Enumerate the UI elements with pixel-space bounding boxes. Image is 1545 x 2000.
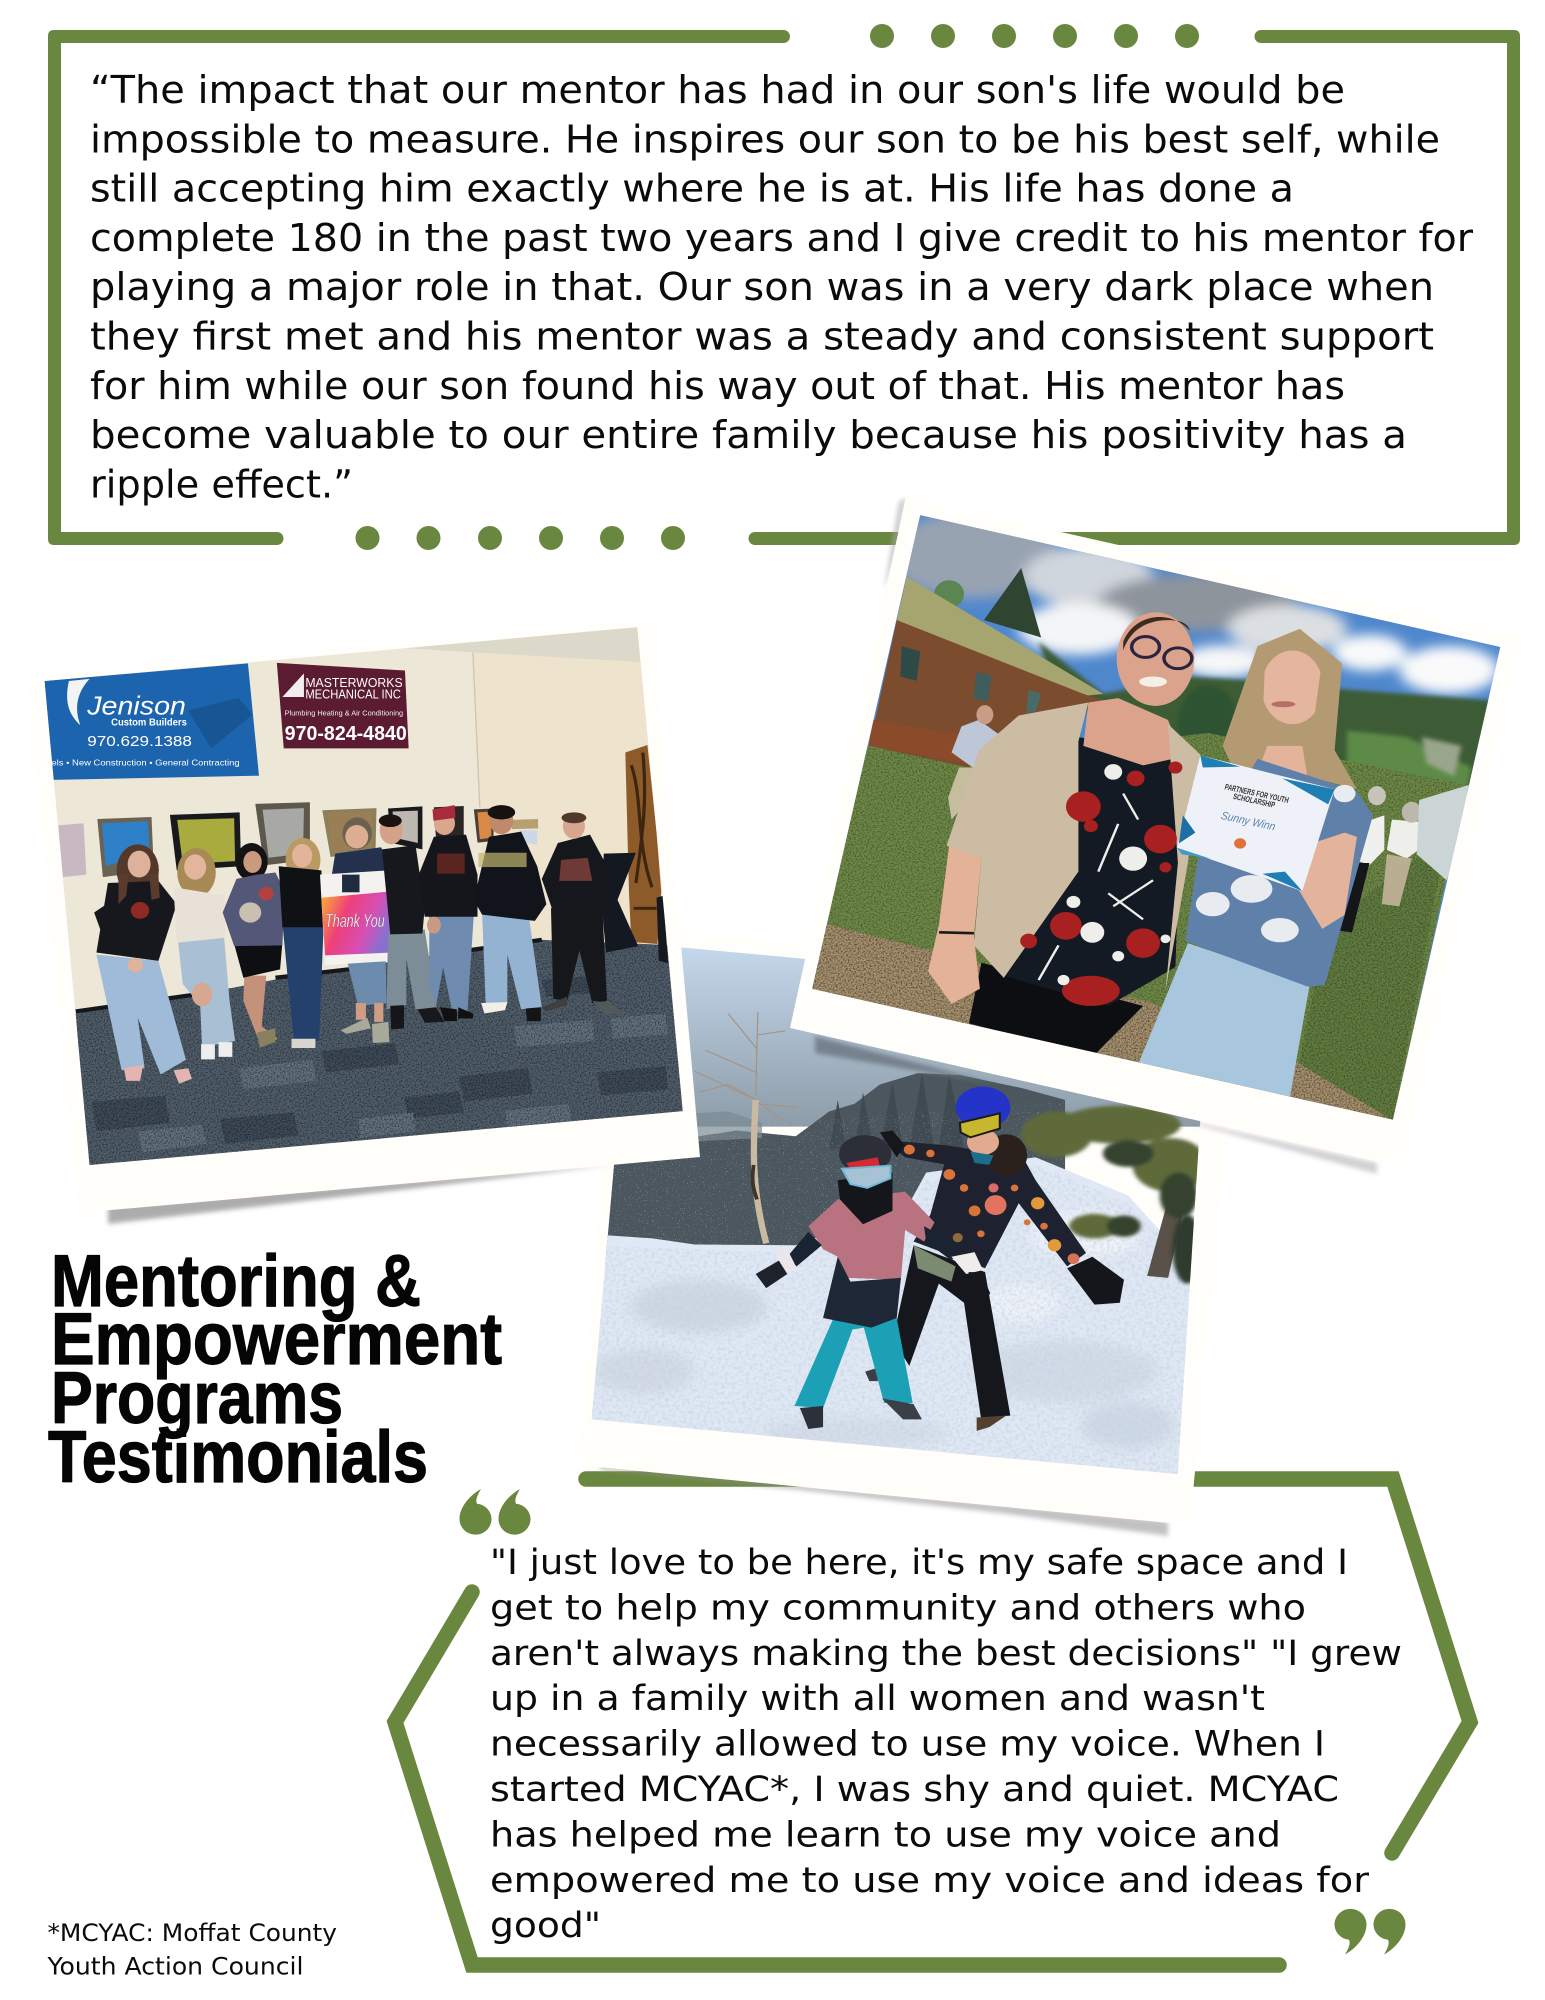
panel: top testimonial frame [48,24,1520,550]
scholarship certificate: PARTNERS FOR YOUTH [1224,782,1290,805]
title: Mentoring & [51,1241,421,1322]
wood sculpture and table [601,745,668,963]
text: second testimonial quote: "I just love to be here, it's my safe space and I [490,1543,1348,1583]
person 5 with thank-you poster: Thank You [325,911,385,932]
person 3 [223,843,285,1047]
text: first testimonial quote: impossible to measure. He inspires our son to be his best self, while [90,117,1440,161]
photo: youth council group with thank-you poster [27,620,700,1224]
sponsor banner: Masterworks: MASTERWORKS [305,675,403,690]
sponsor banner: Masterworks: 970-824-4840 [285,723,407,745]
text: first testimonial quote: ripple effect.” [90,462,353,506]
person 6 [379,814,444,1029]
scholarship certificate: SCHOLARSHIP [1232,792,1276,810]
lodge building [868,577,1103,768]
text: second testimonial quote: up in a family with all women and wasn't [490,1679,1265,1719]
person 5 with thank-you poster [320,817,394,1043]
person 8 [474,805,546,1021]
icon: bare aspen tree [695,1012,798,1243]
scholarship certificate [1177,755,1335,891]
panel: bottom testimonial hexagon frame [395,1479,1470,1965]
person 4 [279,838,324,1048]
text: first testimonial quote: still accepting him exactly where he is at. His life has done a [90,167,1294,211]
icon: opening quotation mark [459,1489,530,1535]
sponsor banner: Masterworks [277,663,409,748]
person 7 [419,805,478,1021]
footnote: *MCYAC: Moffat County [48,1919,337,1947]
footnote [46,1919,337,1980]
hills and trees [934,568,1491,794]
text: first testimonial quote [90,68,1473,506]
text: second testimonial quote: empowered me to use my voice and ideas for [490,1861,1370,1901]
text: first testimonial quote: for him while our son found his way out of that. His mentor has [90,364,1345,408]
icon: pine tree [1021,1106,1208,1284]
person 9 [542,812,624,1014]
grass [810,733,1466,1123]
text: first testimonial quote: they first met and his mentor was a steady and consistent support [90,314,1434,358]
text: second testimonial quote: get to help my community and others who [490,1588,1306,1628]
scholarship recipient [1138,629,1373,1097]
text: first testimonial quote: “The impact that our mentor has had in our son's life would be [90,68,1345,112]
text: second testimonial quote: good" [490,1906,601,1946]
sponsor banner: Jenison: els • New Construction • General Contracting [51,758,240,768]
text: second testimonial quote: started MCYAC*, I was shy and quiet. MCYAC [490,1770,1339,1810]
sponsor banner: Jenison: Jenison [86,691,186,720]
person 2 [174,848,235,1059]
sponsor banner: Jenison: 970.629.1388 [87,733,192,750]
person 1 [94,844,192,1084]
text: first testimonial quote: become valuable to our entire family because his positivity has a [90,413,1407,457]
title: Empowerment [51,1299,502,1380]
text: second testimonial quote [490,1543,1402,1946]
text: first testimonial quote: playing a major role in that. Our son was in a very dark place when [90,265,1434,309]
adult skier [865,1086,1124,1431]
photo: youth skiing in the snow [592,948,1200,1538]
sponsor banner: Jenison: Custom Builders [111,717,187,728]
footnote: Youth Action Council [46,1952,304,1980]
text: second testimonial quote: aren't always making the best decisions" "I grew [490,1634,1402,1674]
icon: closing quotation mark [1335,1909,1406,1954]
title: Testimonials [48,1417,428,1498]
text: first testimonial quote: complete 180 in the past two years and I give credit to his mentor for [90,216,1473,260]
clouds [889,512,1499,694]
wall paintings [58,802,538,877]
sponsor banner: Masterworks: Plumbing Heating & Air Conditioning [285,709,403,717]
child skier [756,1135,990,1429]
sponsor banner: Jenison [45,663,259,780]
photo: scholarship recipient with mentor [790,497,1521,1174]
background people [948,705,1469,932]
title: Programs [51,1358,343,1439]
wood chips [810,924,1397,1123]
sponsor banner: Masterworks: MECHANICAL INC [305,687,401,702]
scholarship certificate: Sunny Winn [1219,809,1277,833]
text: second testimonial quote: necessarily allowed to use my voice. When I [490,1725,1325,1765]
mentor [928,612,1200,1056]
title [48,1241,502,1498]
text: second testimonial quote: has helped me learn to use my voice and [490,1815,1281,1855]
carpet floor [76,940,689,1167]
